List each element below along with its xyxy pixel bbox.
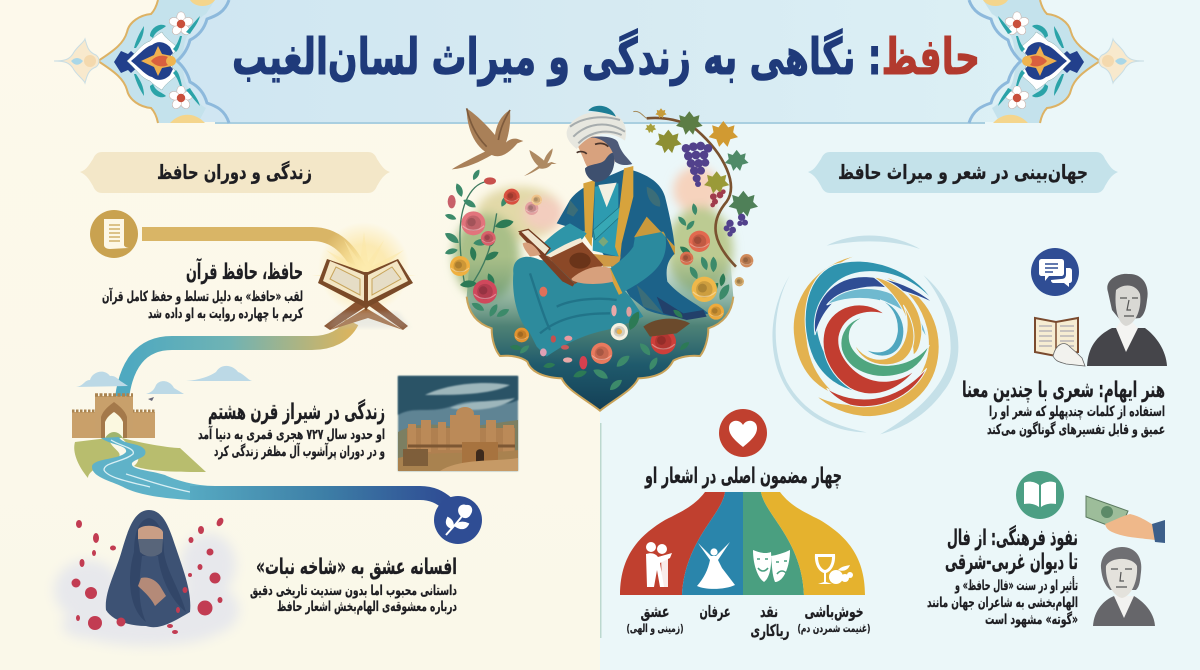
heading pill: life and times: زندگی و دوران حافظ: [157, 160, 312, 184]
background: cream left side: [0, 0, 602, 670]
segment: mysticism: [682, 492, 743, 595]
text block: Shakh-e Nabat legend: [250, 555, 457, 615]
text block: cultural influence: نفوذ فرهنگی: از فال: [947, 524, 1078, 551]
garden watercolor wash: [453, 167, 733, 300]
text block: cultural influence: الهام‌بخشی به شاعران جهان مانند: [927, 595, 1078, 611]
gold collar: [583, 180, 595, 247]
text block: cultural influence: تا دیوان غربی-شرقی: [945, 550, 1078, 575]
illustration: book held in hand: [1035, 318, 1085, 366]
timeline path: gold to teal segment: [122, 322, 352, 398]
chart: four themes dome: [620, 492, 865, 595]
lower robe: [513, 257, 643, 357]
icon: scroll: [90, 210, 138, 258]
text block: Shakh-e Nabat legend: افسانه عشق به «شاخه نبات»: [256, 555, 457, 580]
text block: Hafez title: [102, 257, 304, 322]
left garden stems and leaves: [460, 180, 497, 287]
bird small: [524, 148, 557, 176]
medallion frame: [467, 257, 733, 411]
column divider: [600, 423, 602, 638]
timeline path: teal to navy segment: [190, 493, 448, 504]
icon: whirling dervish: [697, 542, 735, 589]
label: joy of the moment: [798, 602, 870, 635]
segment: joy of the moment: [761, 492, 865, 595]
background: pale blue right side: [600, 0, 1200, 670]
label: critique of hypocrisy: [750, 602, 790, 640]
label: mysticism: عرفان: [700, 602, 730, 621]
illustration: Shiraz gate and river: [72, 366, 252, 500]
hands: [572, 266, 613, 284]
bird large: [452, 108, 523, 169]
portrait: Goethe engraving top: [1087, 274, 1167, 366]
text block: Hafez title: حافظ، حافظ قرآن: [186, 257, 303, 285]
text block: Shakh-e Nabat legend: داستانی محبوب اما بدون سندیت تاریخی دقیق: [250, 583, 457, 599]
text block: Shakh-e Nabat legend: درباره معشوقه‌ی الهام‌بخش اشعار حافظ: [277, 599, 457, 615]
text block: life in Shiraz: و در دوران پرآشوب آل مظفر زندگی کرد: [214, 442, 385, 460]
illustration: Hafez reading in garden medallion: [443, 106, 758, 411]
heading pill: worldview and legacy: [808, 152, 1118, 193]
segment: love: [620, 492, 725, 595]
illustration: ambiguity swirl: [772, 236, 958, 434]
heading pill: life and times: [80, 152, 390, 193]
foreground flowers: [543, 362, 556, 369]
text block: life in Shiraz: [198, 398, 385, 460]
heading pill: worldview and legacy: جهان‌بینی در شعر و میراث حافظ: [838, 160, 1088, 184]
coat: [557, 168, 708, 317]
text block: cultural influence: «گوته» مشهود است: [985, 611, 1078, 628]
segment: critique of hypocrisy: [743, 492, 804, 595]
head: [577, 137, 615, 178]
illustration: hand holding banknote: [1086, 496, 1165, 543]
text block: Hafez title: کریم با چهارده روایت به او داده شد: [148, 306, 304, 322]
sleeves: [608, 231, 666, 294]
icon: theatre masks: [753, 550, 790, 582]
icon: heart: [719, 409, 767, 457]
header banner: [54, 0, 1144, 124]
timeline path: gold segment: [142, 234, 360, 270]
right garden: [704, 280, 721, 299]
book: [519, 229, 550, 255]
heading: four main themes: چهار مضمون اصلی در اشعار او: [644, 464, 842, 489]
ornament: right arabesque: [969, 0, 1144, 123]
label: love: عشق: [640, 602, 670, 621]
label: critique of hypocrisy: ریاکاری: [750, 621, 790, 640]
grape vine: [647, 118, 736, 267]
label: joy of the moment: (غنیمت شمردن دم): [798, 622, 870, 635]
icon: open Quran on stand: [312, 222, 416, 330]
text block: life in Shiraz: او حدود سال ۷۲۷ هجری قمری به دنیا آمد: [198, 425, 385, 443]
label: joy of the moment: خوش‌باشی: [804, 602, 864, 621]
text block: Hafez title: لقب «حافظ» به دلیل تسلط و حفظ کامل قرآن: [102, 287, 303, 305]
text block: cultural influence: تأثیر او در سنت «فال حافظ» و: [954, 576, 1078, 594]
illustration: stormy citadel: [398, 376, 518, 471]
roses: [461, 211, 485, 235]
icon: speech bubbles: [1031, 248, 1079, 296]
text block: cultural influence: [927, 524, 1078, 628]
text block: life in Shiraz: زندگی در شیراز قرن هشتم: [208, 398, 385, 425]
text block: art of ambiguity: [962, 378, 1165, 438]
icon: goblet and fruit: [815, 554, 853, 584]
portrait: Goethe engraving bottom: [1093, 547, 1155, 626]
title: حافظ: نگاهی به زندگی و میراث لسان‌الغیب: [232, 28, 980, 87]
icon: rose: [434, 496, 482, 544]
illustration: Shakh-e Nabat veiled woman: [54, 510, 239, 646]
label: critique of hypocrisy: نقد: [760, 602, 778, 621]
label: love: [626, 602, 684, 635]
icon: open book: [1016, 471, 1064, 519]
label: love: (زمینی و الهی): [626, 622, 684, 635]
chest: [593, 183, 618, 257]
ornament: left arabesque: [54, 0, 229, 123]
icon: embracing couple: [646, 542, 672, 587]
